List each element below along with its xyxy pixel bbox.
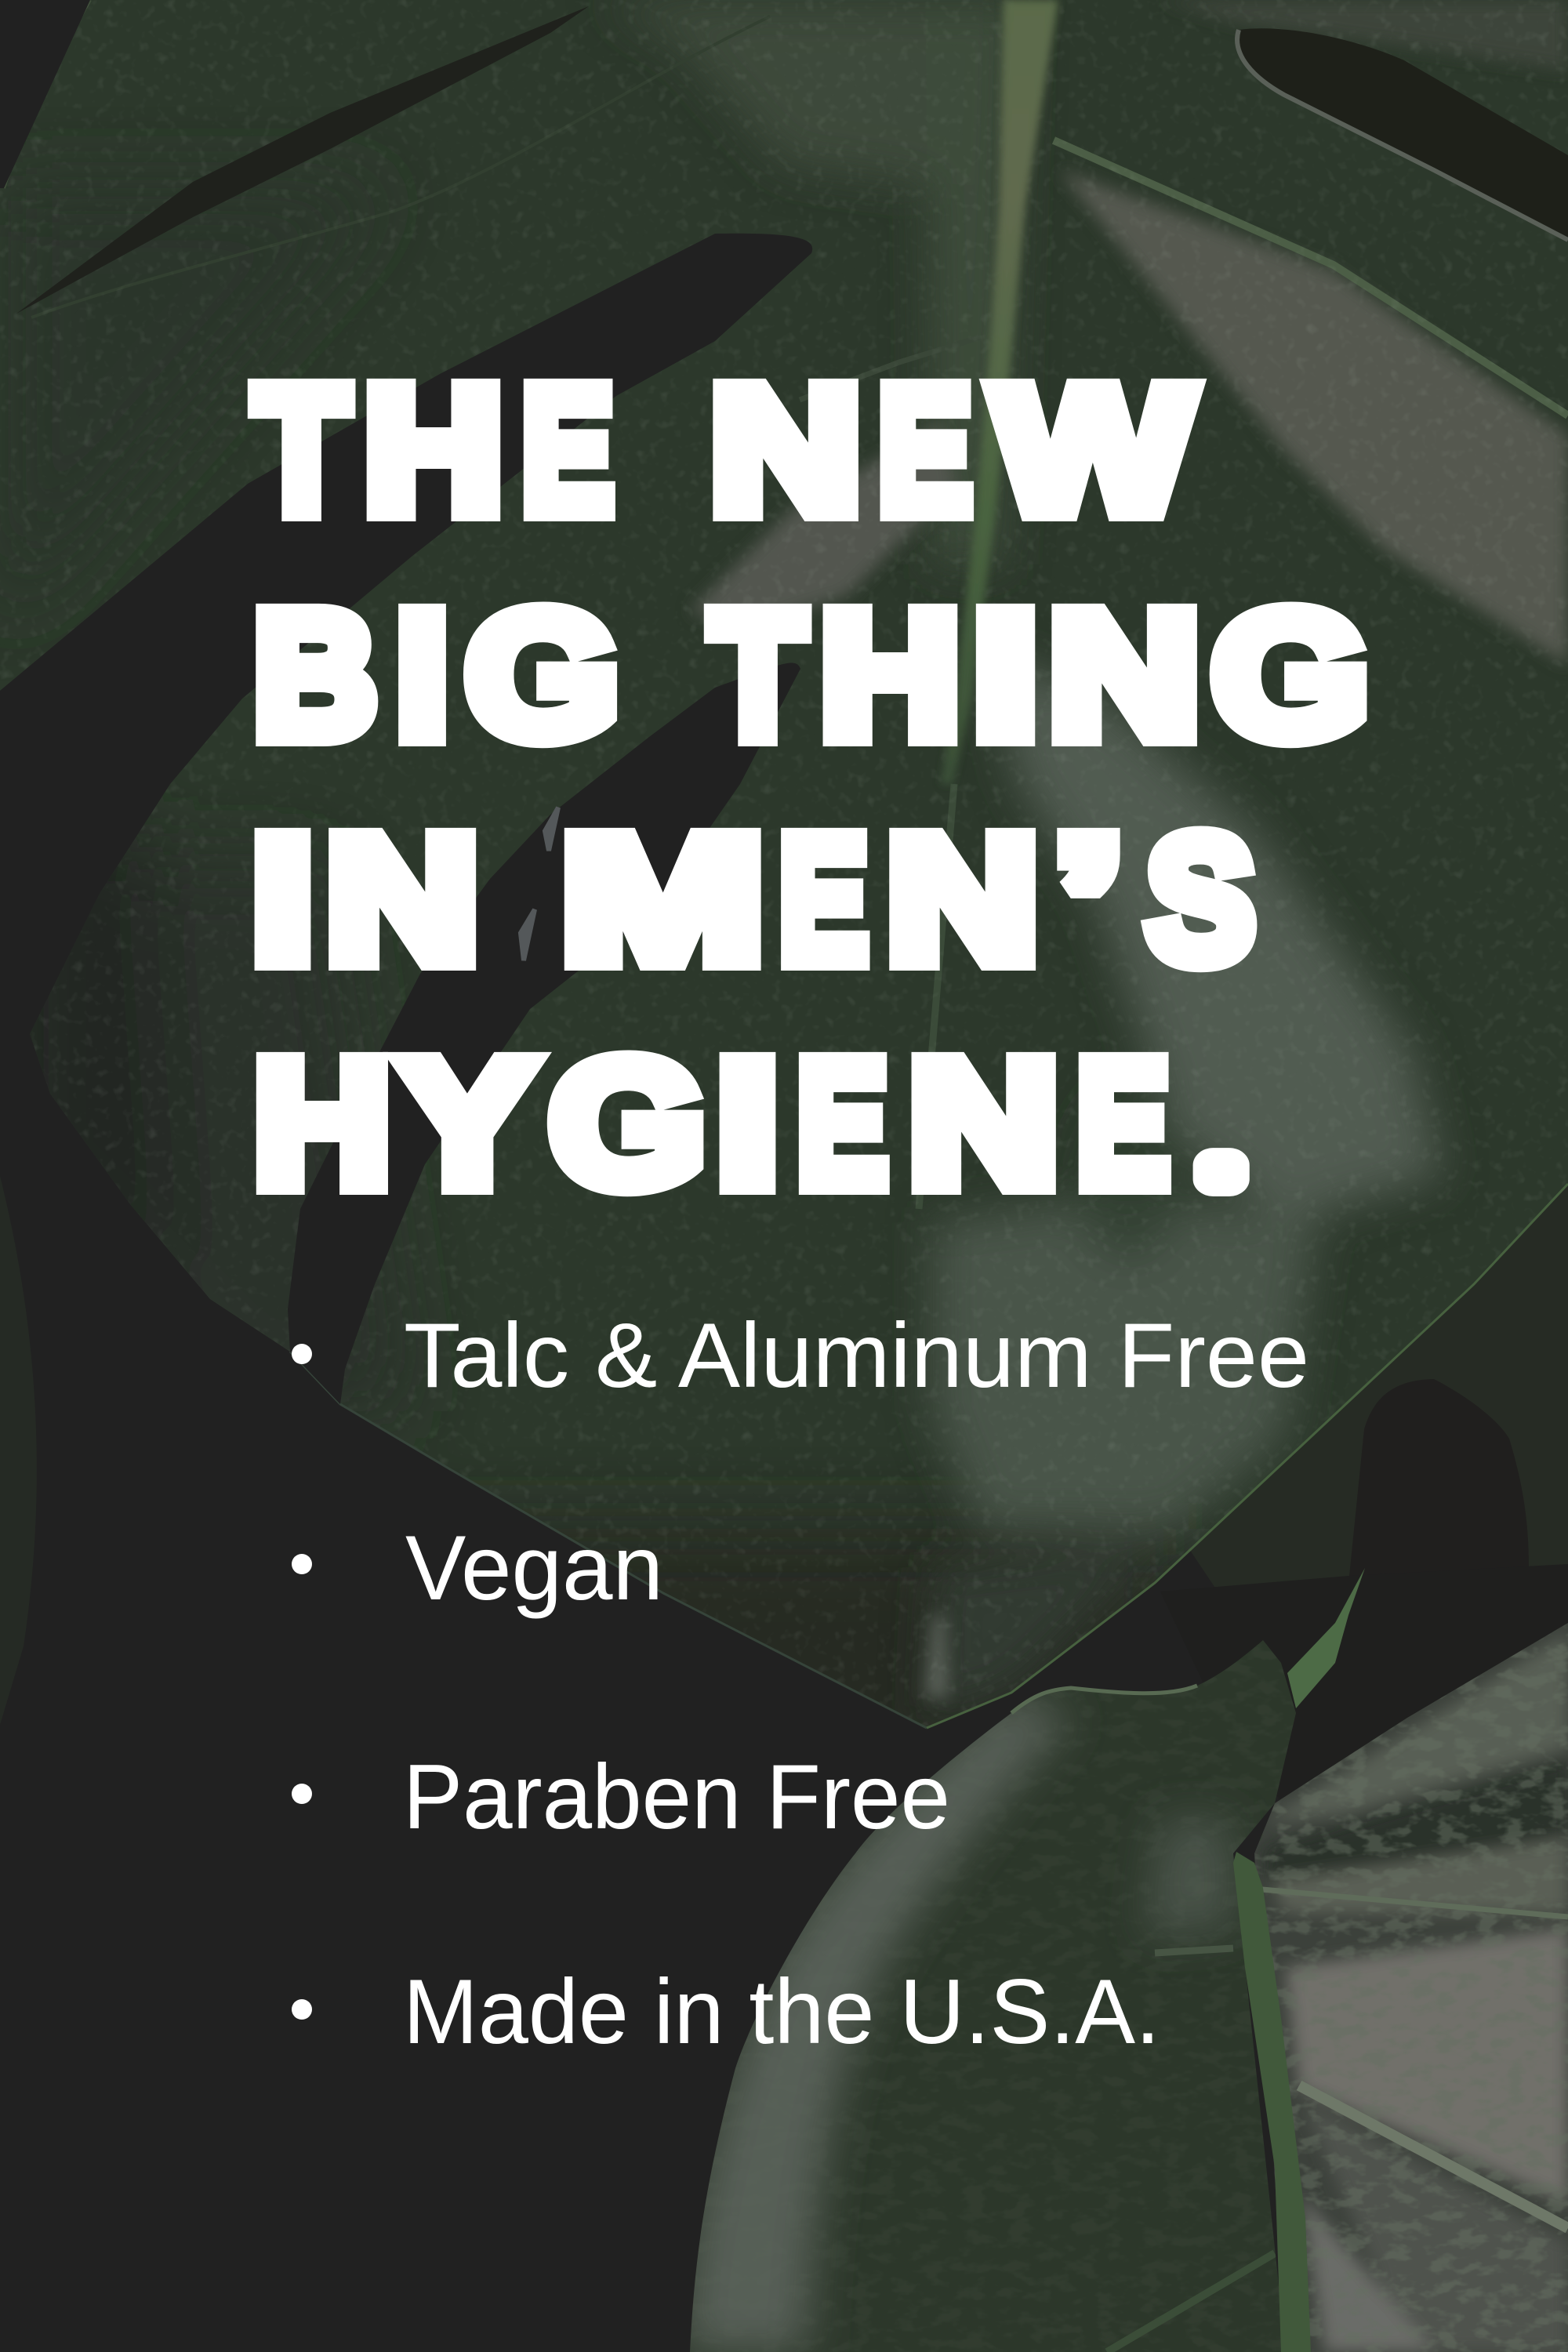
title line 4: .	[1206, 1094, 1237, 1200]
main leaf mass	[0, 0, 1568, 1803]
title line 2: I	[397, 576, 448, 775]
title line 4: H	[254, 1025, 390, 1223]
title line 1: E	[522, 351, 613, 550]
title line 3: E	[779, 800, 867, 999]
benefits list	[292, 1304, 1309, 2063]
title line 1: E	[879, 351, 971, 550]
title line 2: T	[711, 576, 804, 775]
dark region lower right behind leaf	[1189, 1184, 1568, 1803]
item: made in the usa: Made in the U.S.A.	[403, 1960, 1160, 2063]
green sliver behind leaf	[1287, 1568, 1365, 1708]
item: talc and aluminum free: Talc & Aluminum Free	[404, 1304, 1309, 1406]
title	[252, 351, 1368, 1223]
title line 4: N	[909, 1025, 1058, 1223]
leaf rim highlight	[1011, 1686, 1197, 1713]
item: vegan	[292, 1516, 663, 1619]
main midrib	[941, 0, 1058, 784]
slit lower rim highlight	[1237, 30, 1568, 240]
title line 4: G	[550, 1025, 705, 1223]
title line 4: E	[1077, 1025, 1169, 1223]
title line 3: M	[562, 800, 764, 999]
title line 1: N	[711, 351, 861, 550]
title line 2: N	[1050, 576, 1200, 775]
title line 2: G	[466, 576, 618, 775]
slit gray highlights	[521, 808, 558, 960]
item: paraben free: Paraben Free	[403, 1745, 950, 1848]
upper-right slit	[1237, 28, 1568, 240]
title line 4: E	[797, 1025, 887, 1223]
title line 3: N	[327, 800, 478, 999]
leaf veins	[4, 0, 1568, 1209]
title line 2: B	[254, 576, 376, 775]
darkest zone above veined leaf	[1160, 1564, 1568, 1807]
faint far-left leaf	[0, 1176, 37, 1725]
small lower-right dark lobe	[1348, 1379, 1529, 1584]
title line 2: H	[821, 576, 960, 775]
title line 3: ’	[1054, 800, 1123, 999]
leaf edges	[290, 1184, 1568, 1728]
lower right leaf	[682, 1568, 1365, 2352]
upper-left slit	[16, 6, 589, 314]
title line 2: I	[974, 576, 1037, 775]
title line 1: H	[365, 351, 503, 550]
title line 3: S	[1147, 800, 1254, 999]
title line 4: Y	[400, 1025, 535, 1223]
droplet texture	[0, 0, 1568, 1803]
title line 1: W	[994, 351, 1192, 550]
title line 3: N	[887, 800, 1038, 999]
middle slit	[288, 662, 800, 1404]
item: vegan: Vegan	[405, 1516, 663, 1619]
green stem	[1233, 1852, 1311, 2352]
title line 1: T	[255, 351, 348, 550]
veined right leaf	[1231, 1607, 1568, 2352]
title line 2: G	[1213, 576, 1368, 775]
title line 4: I	[717, 1025, 778, 1223]
title line 3: I	[252, 800, 313, 999]
